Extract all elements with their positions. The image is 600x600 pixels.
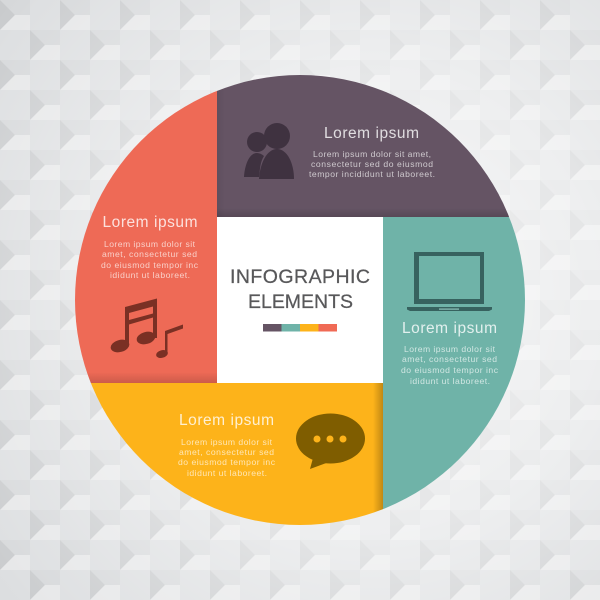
text: red panel <box>101 214 199 280</box>
text: red panel: ididunt ut laboreet. <box>110 270 190 280</box>
text: purple panel: consectetur sed do eiusmod <box>311 159 433 169</box>
text: teal panel: do eiusmod tempor inc <box>401 365 499 375</box>
text: teal panel: Lorem ipsum <box>402 320 497 337</box>
panel: teal segment <box>383 217 525 510</box>
icon: speech bubble <box>296 414 365 469</box>
text: yellow panel: Lorem ipsum <box>179 412 274 429</box>
text: purple panel: Lorem ipsum <box>324 125 419 142</box>
text: red panel: Lorem ipsum dolor sit <box>104 239 196 249</box>
text: red panel: amet, consectetur sed <box>102 249 197 259</box>
icon: music notes <box>109 298 183 359</box>
text: yellow panel <box>178 412 276 478</box>
text: yellow panel: amet, consectetur sed <box>179 447 274 457</box>
text: purple panel: tempor incididunt ut laboreet. <box>309 169 435 179</box>
panel: red segment <box>70 70 217 383</box>
icon: laptop <box>407 252 492 311</box>
text: red panel: Lorem ipsum <box>102 214 198 231</box>
text: yellow panel: Lorem ipsum dolor sit <box>181 437 273 447</box>
text: purple panel <box>309 125 435 179</box>
panel: centre white square <box>217 217 383 383</box>
text: red panel: do eiusmod tempor inc <box>101 260 199 270</box>
colour legend bar <box>263 324 337 332</box>
text: teal panel <box>401 320 499 386</box>
text: yellow panel: ididunt ut laboreet. <box>187 468 267 478</box>
text: teal panel: Lorem ipsum dolor sit <box>404 344 496 354</box>
title <box>230 266 370 313</box>
icon: people <box>244 123 294 179</box>
text: teal panel: amet, consectetur sed <box>402 354 497 364</box>
text: purple panel: Lorem ipsum dolor sit amet, <box>313 149 431 159</box>
text: teal panel: ididunt ut laboreet. <box>410 376 490 386</box>
text: yellow panel: do eiusmod tempor inc <box>178 457 276 467</box>
panel: yellow segment <box>90 383 383 525</box>
title: INFOGRAPHIC <box>230 266 370 288</box>
title: ELEMENTS <box>248 291 353 313</box>
panel: purple segment <box>217 75 509 217</box>
